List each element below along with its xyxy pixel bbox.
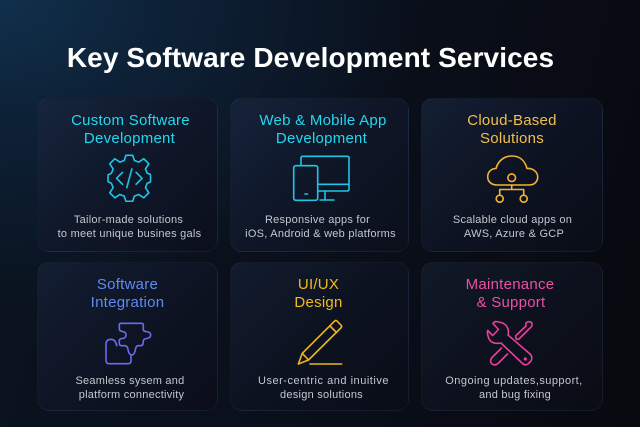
heading: maintenance and support: Maintenance	[466, 276, 554, 293]
heading: maintenance and support	[466, 276, 554, 310]
panel: maintenance and support	[421, 262, 603, 411]
icon: gear with code	[107, 154, 152, 202]
icon: puzzle pieces	[105, 322, 152, 364]
heading: ui/ux design: UI/UX	[298, 276, 339, 293]
heading: maintenance and support: & Support	[477, 294, 545, 310]
description: web and mobile: Responsive apps for	[265, 214, 370, 226]
heading: web and mobile app development	[259, 112, 387, 146]
heading: custom software development: Development	[84, 130, 175, 146]
description: maintenance	[445, 375, 583, 401]
heading: ui/ux design	[294, 276, 343, 310]
heading: cloud-based solutions	[467, 112, 557, 146]
description: cloud: Scalable cloud apps on	[453, 214, 572, 226]
heading: custom software development: Custom Software	[71, 112, 190, 129]
description: integration: Seamless sysem and	[75, 375, 185, 387]
description: integration: platform connectivity	[79, 389, 184, 401]
description: cloud: AWS, Azure & GCP	[464, 228, 564, 240]
description: ui/ux: User-centric and inuitive	[258, 375, 389, 387]
heading: software integration: Integration	[91, 294, 164, 310]
heading: web and mobile app development: Web & Mobile App	[259, 112, 387, 129]
description: web and mobile	[245, 214, 396, 240]
heading: web and mobile app development: Development	[276, 130, 367, 146]
description: maintenance: Ongoing updates,support,	[445, 375, 583, 387]
heading: cloud-based solutions: Solutions	[480, 130, 544, 146]
panel: cloud-based solutions	[421, 98, 603, 252]
panel: web and mobile app development	[230, 98, 409, 252]
description: custom software: Tailor-made solutions	[74, 214, 183, 226]
description: ui/ux	[258, 375, 389, 401]
description: web and mobile: iOS, Android & web platforms	[245, 228, 396, 240]
heading: ui/ux design: Design	[294, 294, 343, 310]
description: cloud	[453, 214, 572, 240]
description: ui/ux: design solutions	[280, 389, 363, 401]
description: maintenance: and bug fixing	[479, 389, 551, 401]
panel: software integration	[37, 262, 218, 411]
heading: custom software development	[71, 112, 190, 146]
heading: software integration: Software	[97, 276, 158, 293]
icon: wrench and screwdriver	[486, 320, 533, 366]
icon: cloud network	[486, 155, 538, 203]
title: Key Software Development Services	[67, 42, 554, 73]
description: integration	[75, 375, 185, 401]
icon: pencil	[298, 320, 342, 365]
description: custom software: to meet unique busines gals	[58, 228, 201, 240]
icon: phone and monitor	[292, 156, 350, 202]
panel: ui/ux design	[230, 262, 409, 411]
heading: cloud-based solutions: Cloud-Based	[467, 112, 557, 129]
description: custom software	[58, 214, 201, 240]
panel: custom software development	[37, 98, 218, 252]
heading: software integration	[91, 276, 164, 310]
